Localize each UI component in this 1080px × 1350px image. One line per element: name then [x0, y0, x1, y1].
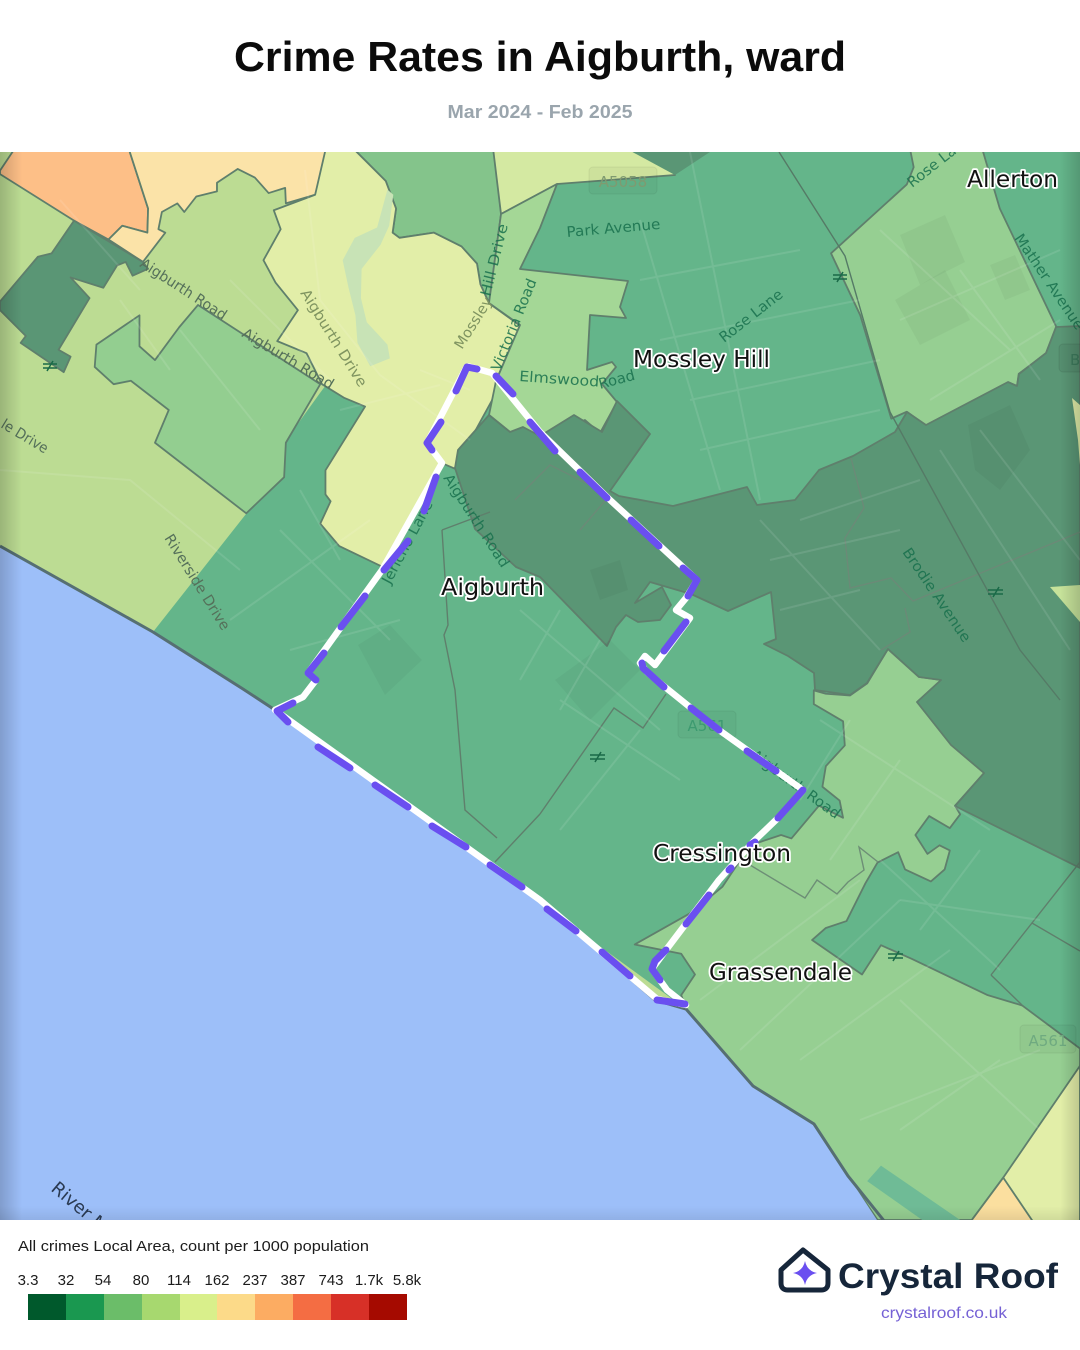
legend title: All crimes Local Area, count per 1000 population — [18, 1238, 369, 1255]
internal boundaries — [442, 152, 1080, 1005]
area: light green west-centre — [95, 305, 320, 513]
area: teal patch by the shore — [867, 1166, 960, 1220]
road label: A561 north shield: A561 — [688, 717, 726, 735]
area: north park fringe — [355, 150, 501, 303]
legend scale values: 1.7k — [355, 1272, 384, 1289]
road labels: Aigburth Road — [239, 326, 336, 393]
road labels: Park Avenue — [566, 217, 661, 241]
legend scale values: 54 — [95, 1272, 111, 1289]
road labels: Rose Lane — [717, 287, 786, 346]
road labels: Aigburth Drive — [297, 287, 370, 390]
faint road network — [0, 152, 1080, 1130]
area: dark north-west block — [0, 221, 148, 372]
road label: A561 south shield — [1020, 1025, 1076, 1053]
area: cream zone — [108, 150, 331, 262]
faint blocks on the map — [921, 270, 946, 284]
place label: Mossley Hill: Mossley Hill — [633, 347, 770, 373]
website url: crystalroof.co.uk — [881, 1305, 1008, 1322]
road labels: Aigburth Road — [748, 747, 843, 823]
legend scale values: 114 — [167, 1272, 191, 1289]
road label: A561 north shield — [678, 711, 736, 738]
area: small dark patch at top — [632, 152, 710, 175]
area: Grassendale light green — [635, 649, 1080, 1220]
area: dark central and eastern zone — [455, 326, 1080, 868]
park lake — [343, 190, 393, 366]
area: Allerton light green — [831, 150, 1057, 426]
legend scale values: 162 — [204, 1272, 230, 1289]
water label: River: River Mersey — [47, 1178, 151, 1270]
road labels: Rose Lane — [905, 132, 974, 191]
road labels: Brodie Avenue — [899, 545, 973, 645]
road labels: Elmswood — [519, 369, 600, 391]
road labels: Aigburth Road — [440, 471, 512, 571]
ward boundary: purple dashes — [277, 367, 803, 1004]
road labels: Victoria Road — [489, 277, 540, 373]
title: Crime Rates in Aigburth, ward — [234, 33, 846, 80]
area: south-east yellow — [972, 1066, 1080, 1220]
icon: house with star — [781, 1250, 828, 1290]
area: yellow-green top band — [493, 148, 675, 214]
road label: B shield — [1059, 344, 1080, 372]
road labels: Hill Drive — [478, 222, 512, 298]
road label: B shield: B — [1070, 351, 1080, 369]
legend — [18, 1238, 422, 1320]
place label: Grassendale: Grassendale — [709, 960, 852, 986]
icons: railway stations — [43, 272, 1003, 961]
road label: A561 south shield: A561 — [1029, 1032, 1067, 1050]
legend scale values: 743 — [318, 1272, 344, 1289]
legend scale values: 3.3 — [18, 1272, 38, 1289]
legend scale values: 32 — [58, 1272, 74, 1289]
area: south-east cream — [972, 1177, 1033, 1220]
road label: A5058 shield: A5058 — [599, 173, 647, 191]
road labels: Mossley — [452, 294, 496, 352]
road labels — [0, 132, 1080, 823]
ward boundary: white line — [275, 366, 803, 1005]
legend scale values: 237 — [242, 1272, 268, 1289]
map edge shading — [0, 152, 1080, 1220]
logo: Crystal Roof — [781, 1250, 1058, 1322]
road label: A5058 shield — [589, 167, 657, 194]
subtitle: date range: Mar 2024 - Feb 2025 — [448, 102, 632, 122]
place label: Allerton: Allerton — [967, 167, 1058, 193]
river water — [0, 546, 877, 1220]
legend scale values: 387 — [280, 1272, 306, 1289]
area: Sefton Park yellow — [263, 150, 520, 567]
legend colour scale — [28, 1294, 407, 1320]
legend scale values — [18, 1272, 422, 1289]
place label: Aigburth: Aigburth — [441, 575, 544, 601]
area: orange high-crime zone — [0, 150, 148, 240]
brand name: Crystal Roof — [838, 1257, 1058, 1296]
legend scale values: 80 — [133, 1272, 149, 1289]
road labels: Road — [597, 368, 637, 393]
place label: Cressington: Cressington — [653, 841, 791, 867]
road labels: Jericho Lane — [379, 498, 437, 588]
yellow slivers on the east edge — [1072, 398, 1080, 465]
area: mid green surrounding the ward — [153, 152, 1080, 1120]
road labels: Riverside Drive — [161, 532, 233, 633]
coastline — [0, 546, 885, 1222]
area: Elmswood light green — [489, 184, 628, 435]
road labels: Aigburth Road — [137, 256, 229, 324]
legend scale values: 5.8k — [393, 1272, 422, 1289]
